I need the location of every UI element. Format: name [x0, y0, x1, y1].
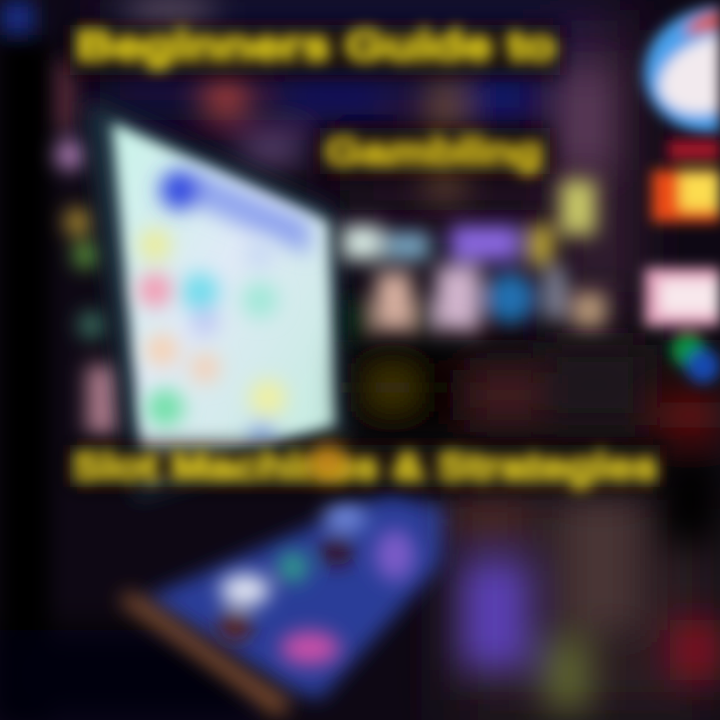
neon oval [644, 6, 720, 133]
neon white sign [645, 268, 720, 383]
heading line 1: Beginners Guide to [76, 22, 556, 70]
heading backdrop shadows [70, 25, 660, 487]
panel buttons [219, 504, 415, 665]
orange glow in heading [310, 444, 346, 480]
panel edge [118, 592, 292, 716]
screen tiles [138, 229, 286, 448]
screen header logo [160, 170, 310, 255]
left dark machine edge [0, 0, 260, 720]
control panel [118, 492, 450, 716]
floor reflections [450, 500, 720, 710]
machine screen [112, 122, 336, 482]
neon orange sign [652, 140, 720, 222]
heading line 3: Slot Machines & Strategies [72, 445, 658, 489]
lower background machines [350, 345, 720, 545]
ceiling lights [130, 0, 610, 200]
machine screen bezel [85, 100, 350, 500]
heading line 2: Gambling [325, 130, 543, 174]
background machines row [342, 180, 606, 342]
left colored light strip [55, 60, 118, 435]
right neon signs [644, 6, 720, 383]
